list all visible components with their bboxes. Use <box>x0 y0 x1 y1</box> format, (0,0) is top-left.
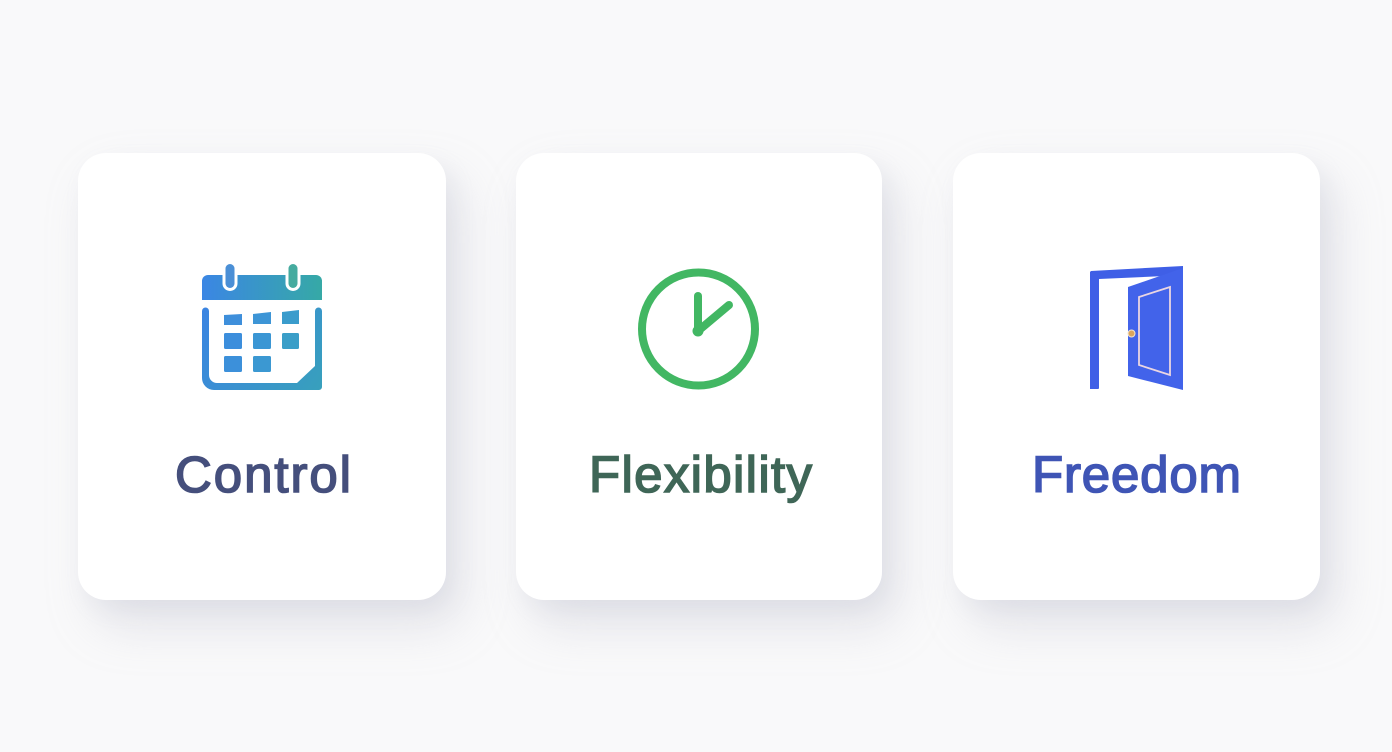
icon: open door <box>1090 266 1183 390</box>
icon: clock <box>642 272 755 386</box>
panel: control card <box>78 153 446 600</box>
heading: Control: Control <box>175 446 351 503</box>
panel: flexibility card <box>516 153 882 600</box>
heading: Flexibility: Flexibility <box>589 446 812 503</box>
icon: calendar <box>202 262 322 390</box>
heading: Freedom: Freedom <box>1032 446 1241 503</box>
panel: freedom card <box>953 153 1320 600</box>
